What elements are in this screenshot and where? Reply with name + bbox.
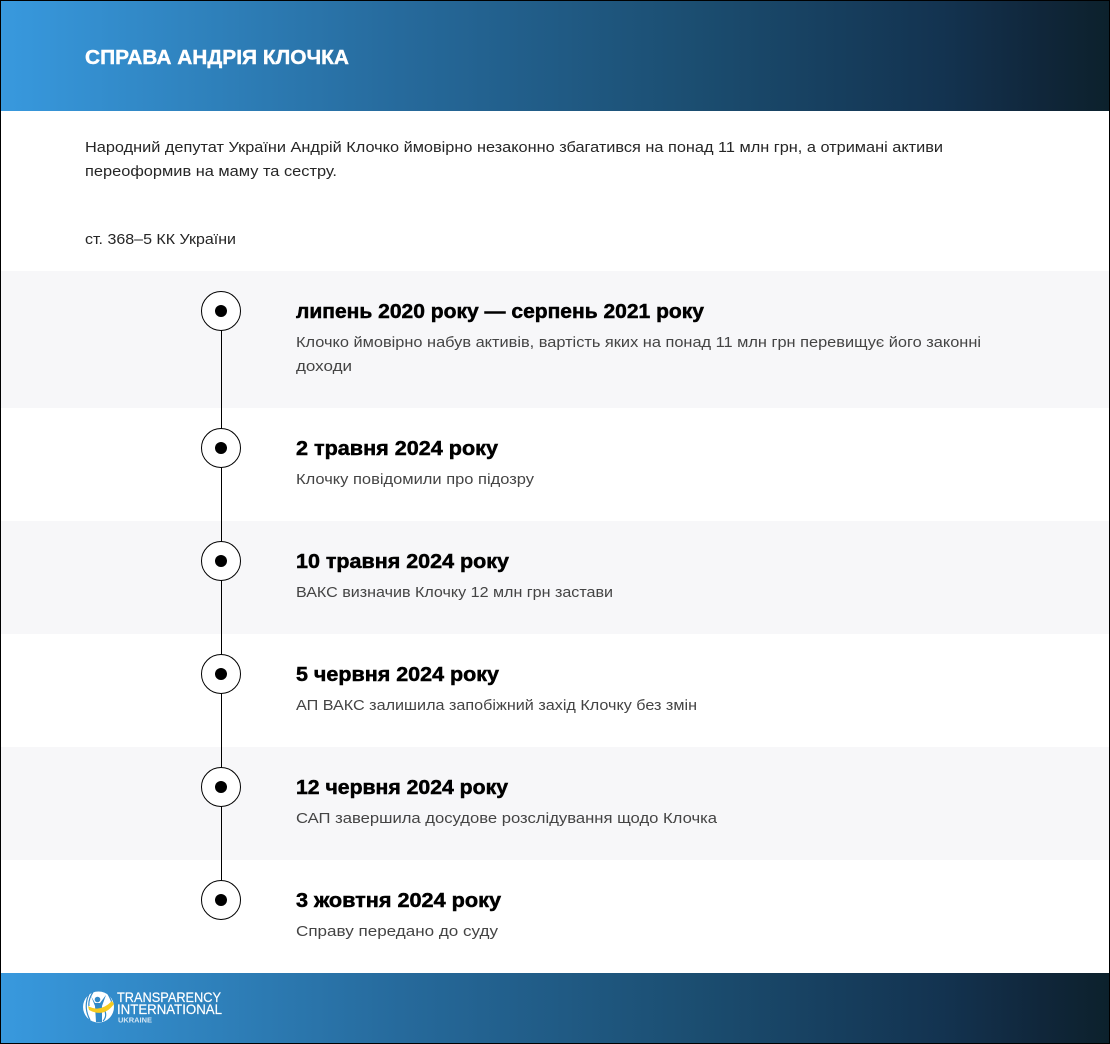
timeline event 6 xyxy=(202,880,502,940)
description 5: САП завершила досудове розслідування щодо Клочка xyxy=(296,810,718,827)
intro text: переоформив на маму та сестру. xyxy=(85,163,337,180)
date 3: 10 травня 2024 року xyxy=(296,551,510,573)
marker 3 xyxy=(202,542,240,580)
row backgrounds xyxy=(1,271,1109,860)
date 2: 2 травня 2024 року xyxy=(296,438,499,460)
marker 5 xyxy=(202,768,240,806)
logo text xyxy=(117,989,222,1024)
header band xyxy=(1,1,1109,111)
footer band xyxy=(1,973,1109,1043)
timeline event 1 xyxy=(202,292,981,375)
logo xyxy=(83,989,222,1024)
timeline event 3 xyxy=(202,542,613,601)
timeline line xyxy=(220,311,222,900)
description 1 xyxy=(296,334,981,375)
description 4: АП ВАКС залишила запобіжний захід Клочку без змін xyxy=(296,697,697,714)
date 4: 5 червня 2024 року xyxy=(296,664,500,686)
description 2: Клочку повідомили про підозру xyxy=(296,471,535,488)
description 6: Справу передано до суду xyxy=(296,923,499,940)
logo text: UKRAINE xyxy=(118,1016,152,1024)
legal article reference: ст. 368–5 КК України xyxy=(85,231,236,248)
title: СПРАВА АНДРІЯ КЛОЧКА xyxy=(85,47,349,69)
intro text xyxy=(85,139,943,180)
marker 1 xyxy=(202,292,240,330)
marker 4 xyxy=(202,654,240,694)
logo text: INTERNATIONAL xyxy=(117,1001,222,1017)
timeline event 5 xyxy=(202,768,718,827)
description 3: ВАКС визначив Клочку 12 млн грн застави xyxy=(296,584,613,601)
logo text: TRANSPARENCY xyxy=(117,989,222,1005)
date 5: 12 червня 2024 року xyxy=(296,777,509,799)
intro text: Народний депутат України Андрій Клочко ймовірно незаконно збагатився на понад 11 млн грн, а отримані активи xyxy=(85,139,943,156)
description 1: доходи xyxy=(296,358,352,375)
marker 2 xyxy=(202,428,240,468)
timeline event 2 xyxy=(202,428,535,488)
icon: globe with figure xyxy=(83,992,114,1022)
marker 6 xyxy=(202,880,240,920)
timeline event 4 xyxy=(202,654,697,714)
date 6: 3 жовтня 2024 року xyxy=(296,890,502,912)
date 1: липень 2020 року — серпень 2021 року xyxy=(296,301,705,323)
description 1: Клочко ймовірно набув активів, вартість яких на понад 11 млн грн перевищує його законні xyxy=(296,334,981,351)
